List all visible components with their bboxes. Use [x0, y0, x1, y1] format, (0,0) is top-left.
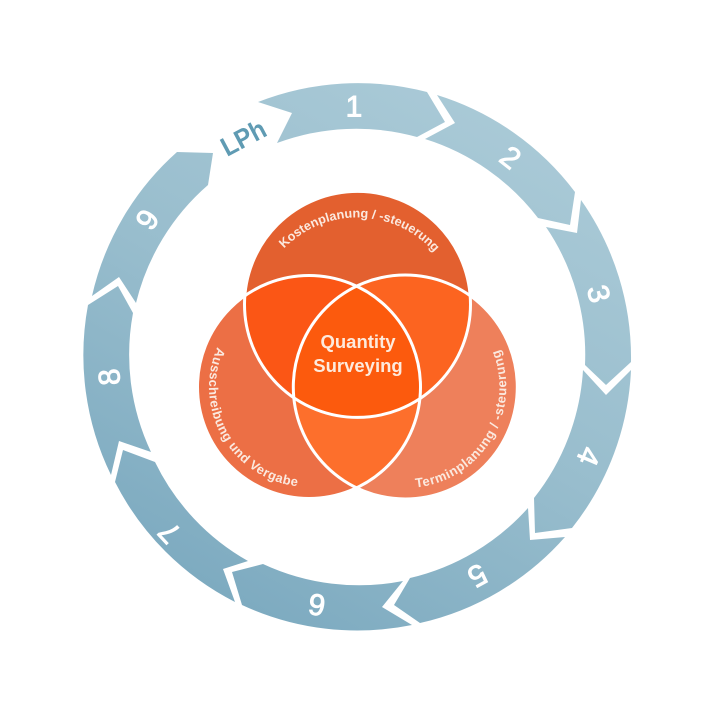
- segment 1: [258, 83, 445, 143]
- number 1: 1: [346, 90, 362, 124]
- white outlines: [198, 191, 517, 499]
- number 4: 4: [570, 442, 606, 470]
- segment 9: [92, 152, 213, 303]
- number 8: 8: [93, 367, 127, 387]
- circle: Terminplanung: [293, 275, 517, 499]
- center title: Quantity: [320, 331, 396, 352]
- number 3: 3: [580, 282, 616, 306]
- overlap: center: [294, 288, 419, 416]
- number 2: 2: [493, 140, 527, 176]
- number 5: 5: [462, 557, 492, 593]
- venn diagram: [199, 192, 516, 498]
- overlap: top and right: [360, 276, 469, 396]
- segment 3: [546, 200, 631, 385]
- label: Ausschreibung und Vergabe: Ausschreibung und Vergabe: [208, 347, 298, 486]
- segment 2: [425, 95, 575, 225]
- center title: Surveying: [313, 355, 403, 376]
- label: Kostenplanung / -steuerung: Kostenplanung / -steuerung: [278, 210, 438, 252]
- infographic: Quantity Surveying process cycle: [83, 83, 631, 630]
- overlap: top and left: [246, 277, 353, 394]
- overlap: left and right: [296, 400, 418, 486]
- process ring: [83, 83, 631, 631]
- segment 8: [83, 286, 151, 475]
- phase numbers: [93, 90, 616, 622]
- segment 4: [534, 370, 631, 533]
- number 7: 7: [152, 515, 188, 549]
- circle: Kostenplanung: [244, 191, 470, 417]
- number 6: 6: [306, 586, 328, 622]
- segment 5: [394, 508, 565, 623]
- number 9: 9: [130, 204, 166, 236]
- LPh label: LPh: [216, 114, 271, 162]
- circle: Ausschreibung: [198, 276, 420, 498]
- segment 6: [232, 564, 412, 631]
- label: Terminplanung / -steuerung: Terminplanung / -steuerung: [414, 350, 506, 488]
- segment 7: [115, 450, 248, 602]
